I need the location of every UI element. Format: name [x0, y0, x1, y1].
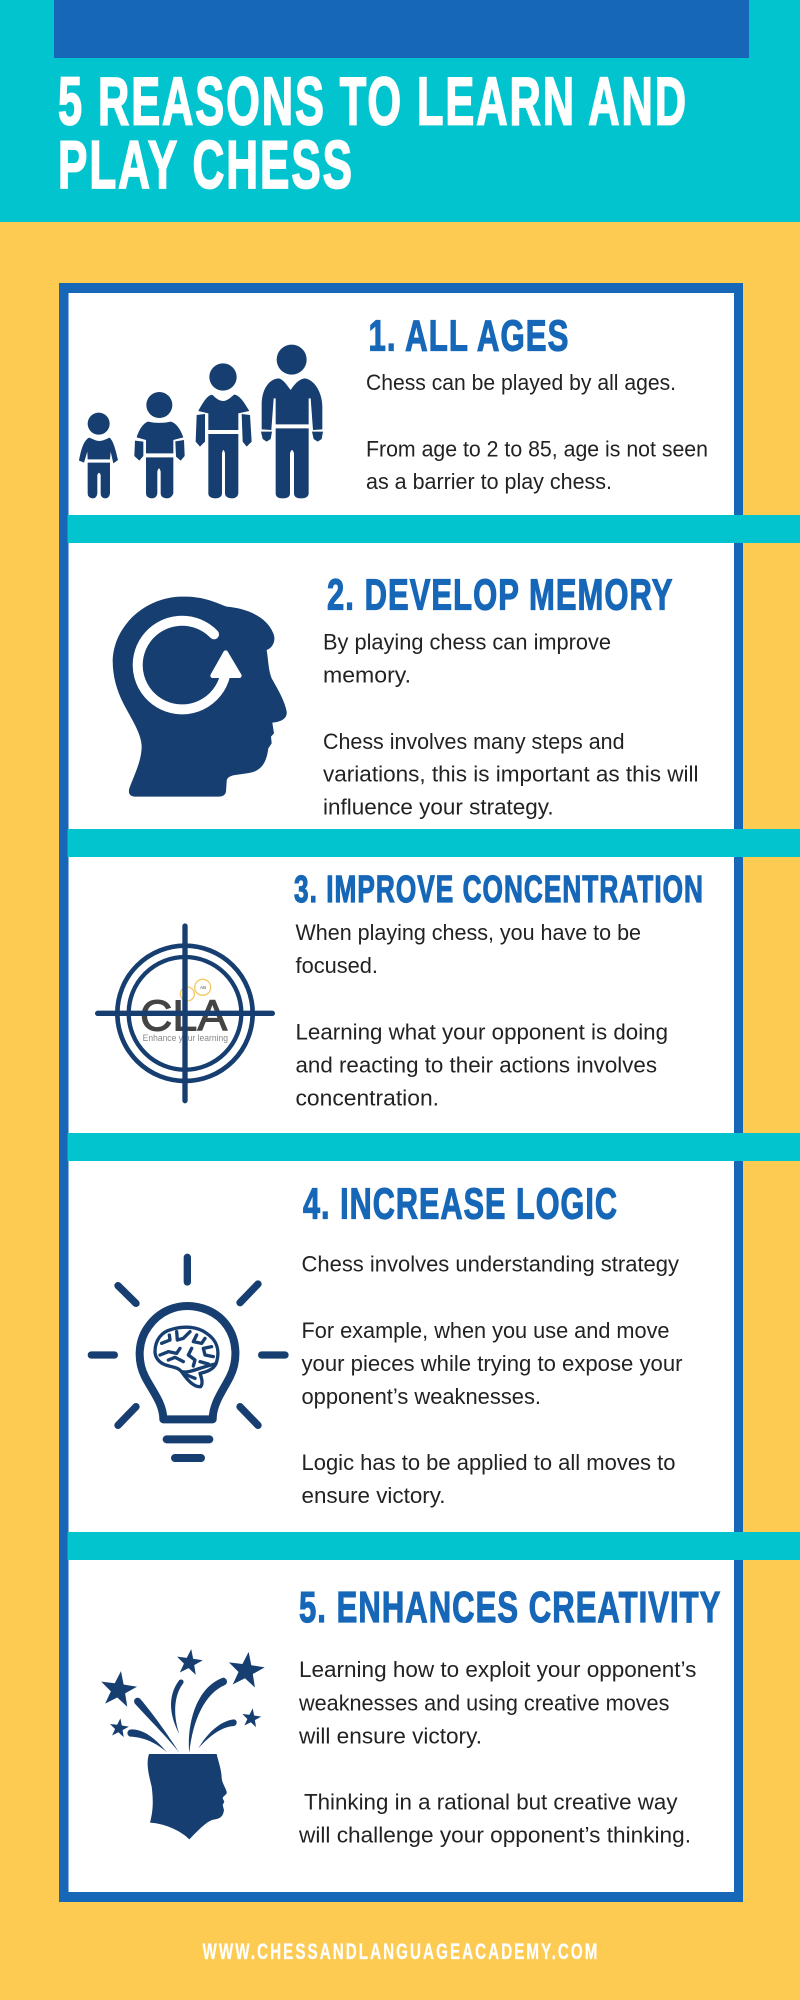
icon: head with circular arrow [113, 597, 287, 797]
text block: develop memory [323, 630, 698, 820]
text block: improve concentration: focused. [296, 953, 378, 978]
text block: enhances creativity: Learning how to exploit your opponent’s [299, 1657, 696, 1682]
logo: CLA: AB [200, 985, 206, 990]
text block: improve concentration: concentration. [296, 1086, 439, 1110]
teal stripe 1 [68, 515, 800, 543]
icon: light bulb with brain [91, 1257, 285, 1458]
teal stripe 2 [68, 829, 800, 857]
header band [0, 0, 800, 222]
text block: develop memory: memory. [323, 663, 411, 688]
text block: improve concentration [296, 920, 668, 1110]
panel: improve concentration [98, 869, 704, 1110]
footer website: WWW.CHESSANDLANGUAGEACADEMY.COM [202, 1939, 600, 1964]
text block: increase logic: ensure victory. [302, 1483, 446, 1508]
panel: all ages [79, 312, 708, 498]
text block: increase logic: opponent’s weaknesses. [302, 1384, 541, 1409]
text block: enhances creativity: Thinking in a rational but creative way [304, 1789, 678, 1814]
text block: all ages: Chess can be played by all ages. [366, 370, 676, 395]
text block: develop memory: By playing chess can improve [323, 630, 611, 655]
panel: enhances creativity [98, 1583, 721, 1848]
text block: enhances creativity: weaknesses and using creative moves [298, 1691, 669, 1716]
text block: develop memory: influence your strategy. [323, 794, 554, 820]
panel: increase logic [91, 1180, 682, 1508]
text block: improve concentration: When playing chess, you have to be [296, 920, 641, 945]
text block: improve concentration: and reacting to their actions involves [296, 1052, 657, 1077]
card frame [59, 283, 743, 1902]
text block: enhances creativity [298, 1657, 696, 1848]
text block: increase logic: Chess involves understanding strategy [302, 1252, 679, 1277]
title [58, 64, 688, 203]
text block: develop memory: variations, this is important as this will [323, 761, 698, 786]
icon: head with stars [98, 1647, 267, 1839]
text block: all ages: From age to 2 to 85, age is not seen [366, 436, 708, 462]
text block: increase logic: your pieces while trying to expose your [302, 1351, 682, 1376]
teal stripe 3 [68, 1133, 800, 1161]
icon: target with CLA logo [98, 926, 272, 1101]
text block: increase logic [302, 1252, 682, 1508]
text block: all ages [366, 370, 708, 494]
logo: CLA: Enhance your learning [143, 1033, 228, 1043]
logo: CLA: CLA [140, 993, 227, 1041]
text block: develop memory: Chess involves many steps and [323, 729, 624, 754]
text block: enhances creativity: will ensure victory. [298, 1724, 482, 1749]
text block: increase logic: For example, when you use and move [302, 1318, 670, 1343]
icon detail: brain [155, 1327, 218, 1387]
panel: develop memory [113, 570, 698, 820]
icon: four growing people [79, 345, 323, 498]
text block: improve concentration: Learning what your opponent is doing [296, 1019, 668, 1044]
teal stripe 4 [68, 1532, 800, 1560]
title: PLAY CHESS [58, 127, 354, 203]
text block: increase logic: Logic has to be applied to all moves to [302, 1450, 676, 1475]
text block: enhances creativity: will challenge your opponent’s thinking. [298, 1823, 691, 1848]
heading: all ages: 1. ALL AGES [368, 312, 570, 360]
text block: all ages: as a barrier to play chess. [366, 469, 612, 494]
heading: increase logic: 4. INCREASE LOGIC [303, 1180, 618, 1228]
